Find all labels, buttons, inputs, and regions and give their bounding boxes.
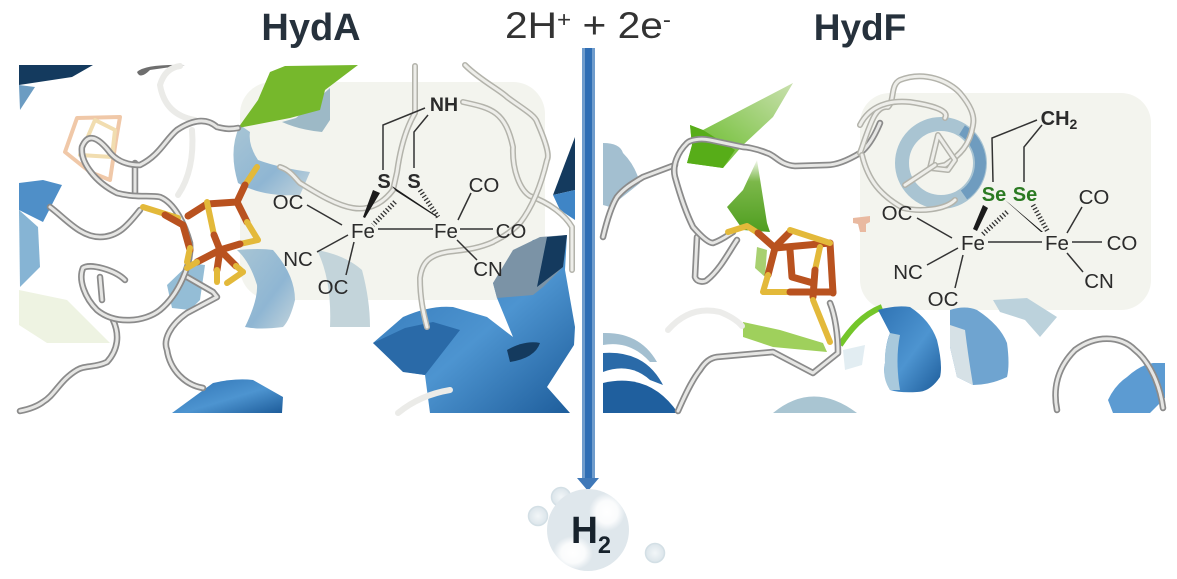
reaction label: protons and electrons: + xyxy=(557,7,571,32)
atom labels: CO xyxy=(496,220,526,243)
highlight panel behind HydA cofactor xyxy=(240,82,545,300)
atom labels: OC xyxy=(882,202,913,225)
ribbon: bright green strand xyxy=(840,307,882,345)
atom labels: OC xyxy=(928,288,959,311)
atom labels: CO xyxy=(469,174,499,197)
bonds xyxy=(307,108,493,275)
ribbon: grey-blue piece behind green sheet xyxy=(282,88,330,132)
atom labels: OC xyxy=(318,276,349,299)
ribbon: pale patch under strand xyxy=(843,345,865,370)
atom labels: Fe xyxy=(434,220,458,243)
ribbon: green sheet centre xyxy=(727,160,770,232)
label: H2: 2 xyxy=(598,532,611,559)
title: HydF: HydF xyxy=(814,7,906,48)
reaction label: protons and electrons: - xyxy=(663,7,671,32)
atom labels: CO xyxy=(1079,186,1109,209)
atom labels: NC xyxy=(283,248,313,271)
atom labels: CN xyxy=(1084,270,1114,293)
atom labels: CN xyxy=(473,258,503,281)
ribbon: pale helix top left xyxy=(603,143,640,207)
faded background loops xyxy=(668,310,742,330)
ribbon: helix crescent under green sheet xyxy=(233,125,310,195)
ribbon: pale helix crescent left xyxy=(237,249,295,328)
atom labels: Se xyxy=(1013,184,1037,206)
icon: hydrogen bubble xyxy=(528,488,664,571)
backbone tubes xyxy=(603,123,1163,411)
atom labels: Fe xyxy=(961,232,985,255)
atom labels: 2 xyxy=(1070,116,1078,132)
faded backbone tubes at right xyxy=(280,65,572,327)
backbone tubes xyxy=(20,121,238,411)
ribbon: helix one xyxy=(878,306,941,392)
ribbon: green arrow top xyxy=(687,83,793,168)
cofactor diselenium formula xyxy=(882,108,1137,311)
bonds xyxy=(917,120,1102,288)
ribbon: dark helix right edge xyxy=(553,137,575,220)
bubble highlights xyxy=(553,493,625,570)
main bubble xyxy=(547,489,629,571)
ribbon: pale helix near cluster xyxy=(167,263,205,310)
highlight panel behind HydF cofactor xyxy=(860,93,1151,310)
atom labels: OC xyxy=(273,191,304,214)
ribbon: blue helix bottom right xyxy=(1108,363,1165,413)
atom labels: S xyxy=(377,171,391,193)
atom labels: Se xyxy=(982,184,1006,206)
ribbon: large blue helix bottom right xyxy=(373,235,575,413)
ribbon: faded cluster in background xyxy=(65,117,120,180)
atom labels xyxy=(273,94,526,299)
ribbon: lower green sheet xyxy=(743,322,827,352)
ribbon: faded top loop xyxy=(137,65,185,76)
label: H2: H xyxy=(571,510,598,552)
title: HydA: HydA xyxy=(261,7,361,49)
atom labels: CO xyxy=(1107,232,1137,255)
panel: HydA protein structure xyxy=(19,65,575,413)
ribbon: pale dome bottom xyxy=(773,396,857,413)
ribbon: top-left dark helix xyxy=(19,65,93,110)
atom labels xyxy=(882,108,1137,311)
atom labels: Fe xyxy=(351,220,375,243)
ribbon: green sheet xyxy=(238,65,358,128)
panel: HydF protein structure xyxy=(603,76,1165,413)
ribbon: bottom blue helix xyxy=(172,379,283,413)
ribbon: pale green sheet xyxy=(19,290,110,343)
ribbon: pale helix crescent centre xyxy=(317,250,370,327)
ribbon: left helix xyxy=(19,180,62,287)
ribbon: dark green arrow head xyxy=(687,125,735,168)
reaction label: protons and electrons: 2H xyxy=(505,5,552,46)
small bubbles xyxy=(528,488,664,562)
ribbon: faded residue xyxy=(853,216,870,232)
atom labels: S xyxy=(407,171,421,193)
ribbon: helix two xyxy=(950,308,1008,385)
arrow: electrons and protons to hydrogen xyxy=(577,48,599,491)
reaction label: protons and electrons: + 2e xyxy=(571,5,663,46)
atom labels: NH xyxy=(430,94,458,116)
Fe-S cluster xyxy=(728,226,833,342)
atom labels: CH xyxy=(1041,108,1070,130)
ribbon: pale helix ring xyxy=(902,124,980,202)
cofactor H-cluster formula xyxy=(273,94,526,299)
faded background loops xyxy=(160,66,450,413)
coiled loop tubes xyxy=(860,76,973,210)
ribbon: pale helix tail xyxy=(993,298,1057,337)
ribbon: small green sheet xyxy=(755,247,767,277)
Fe-S cluster xyxy=(143,167,258,283)
ribbon: left blue helix stack xyxy=(603,333,678,413)
atom labels: Fe xyxy=(1045,232,1069,255)
atom labels: NC xyxy=(893,261,923,284)
